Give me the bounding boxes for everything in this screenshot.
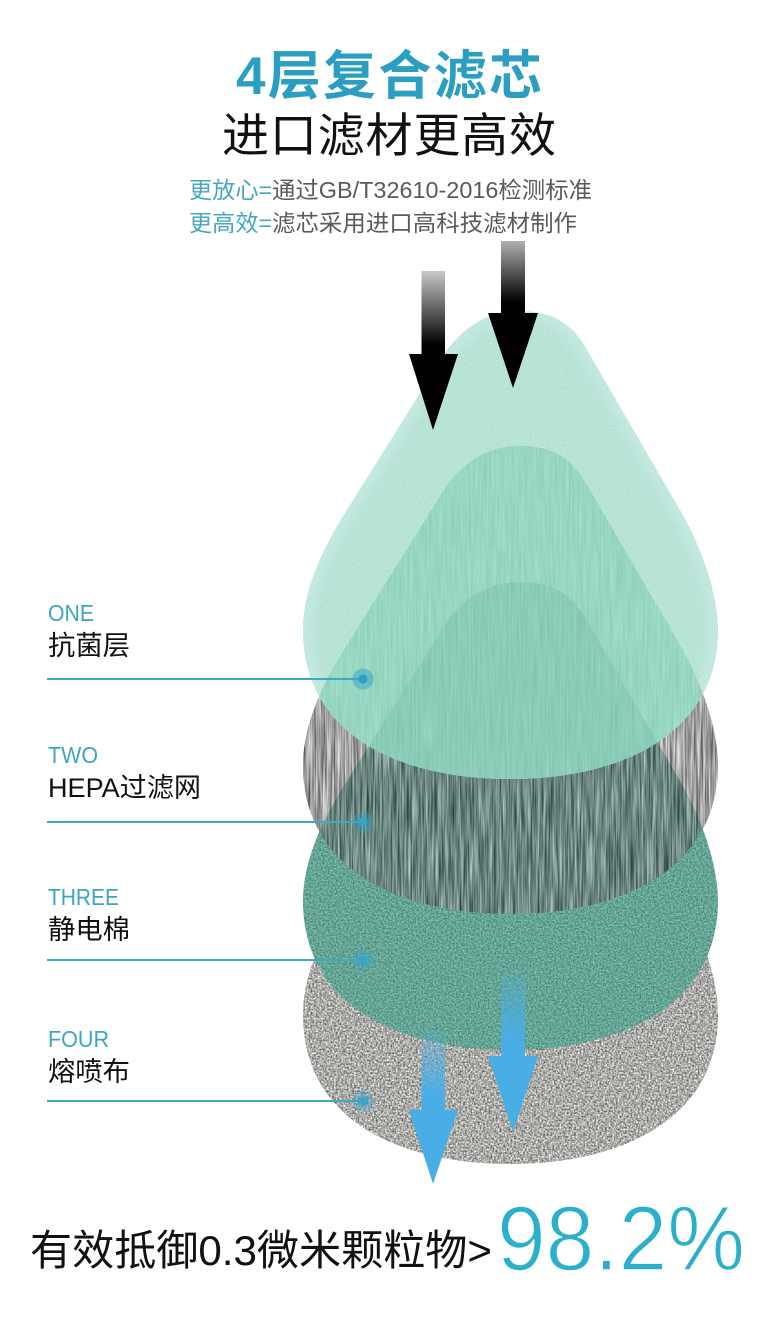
bottom claim [30,1188,745,1290]
blue arrow left [409,1030,458,1184]
label: layer two: TWO [48,742,98,768]
layer 3: electrostatic cotton [303,829,718,1050]
black arrow right [488,241,538,388]
label: layer two: HEPA过滤网 [48,773,201,803]
layer 1: antibacterial [290,300,730,790]
layer 4: melt-blown fabric [303,956,718,1164]
label: layer four [47,1026,374,1112]
label: layer one [47,600,374,690]
subtitle line 1 body: 通过GB/T32610-2016检测标准 [272,177,592,203]
title line 2: 进口滤材更高效 [222,109,556,162]
label: layer four: FOUR [48,1026,109,1052]
title [222,47,556,162]
subtitle text block [189,177,592,236]
label: layer three [47,884,374,970]
efficiency figure: 98.2% [497,1188,745,1290]
subtitle line 2 body: 滤芯采用进口高科技滤材制作 [272,210,577,236]
layer 2: HEPA mesh [303,694,718,914]
label: layer two [47,742,374,832]
label: layer one: 抗菌层 [48,631,130,661]
label: layer four: 熔喷布 [48,1057,130,1087]
filter layers diagram [290,300,730,1180]
label: layer three: 静电棉 [48,915,130,945]
title line 1: 4层复合滤芯 [236,47,542,106]
claim text: 有效抵御0.3微米颗粒物> [30,1227,492,1274]
label: layer one: ONE [48,600,94,626]
label: layer three: THREE [48,884,119,910]
blue arrow right [488,975,538,1132]
subtitle line 1 label: 更放心= [189,177,272,203]
subtitle line 2 label: 更高效= [189,210,272,236]
black arrow left [409,271,458,430]
